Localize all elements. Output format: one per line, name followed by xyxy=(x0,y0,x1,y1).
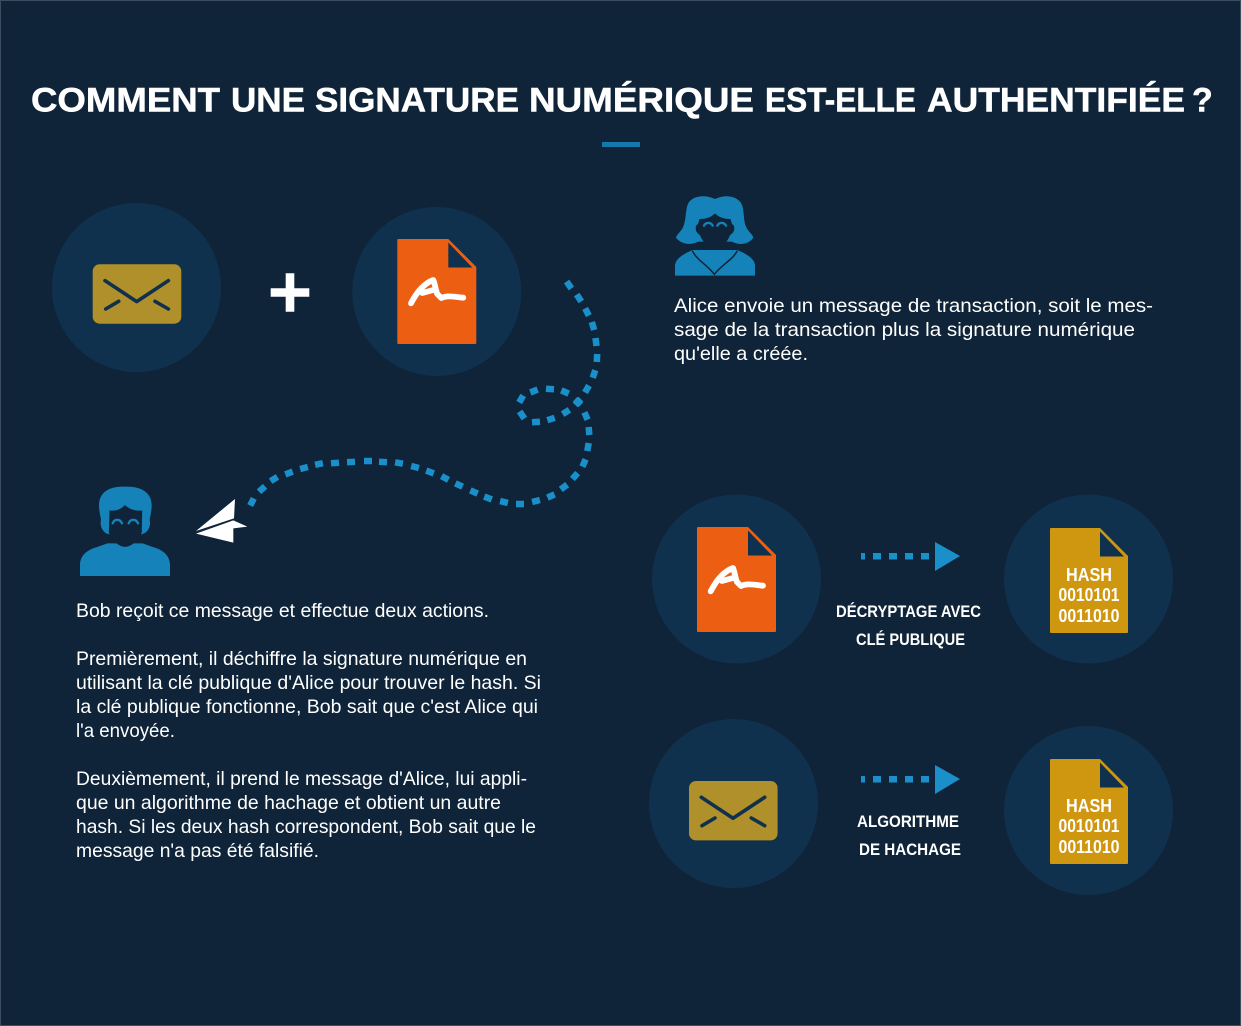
arrow: hashing xyxy=(861,765,960,794)
title underline accent xyxy=(602,142,640,147)
text: Bob description: l'a envoyée. xyxy=(76,720,175,742)
icon: hash document in circle: HASH xyxy=(1066,796,1112,816)
panel: hash message row xyxy=(649,719,1173,895)
text: Bob description: Premièrement, il déchiffre la signature numérique en xyxy=(76,648,527,670)
title: AUTHENTIFIÉE xyxy=(927,82,1185,120)
text: Alice description: qu'elle a créée. xyxy=(674,343,808,365)
text: Alice description xyxy=(674,295,1153,365)
label: decrypt with public key xyxy=(836,602,981,649)
text: Bob description: message n'a pas été falsifié. xyxy=(76,840,319,862)
title: COMMENT xyxy=(31,82,220,120)
title: NUMÉRIQUE xyxy=(529,82,754,120)
label: hashing algorithm xyxy=(857,812,961,859)
text: Bob description xyxy=(76,600,541,862)
label: decrypt with public key: DÉCRYPTAGE AVEC xyxy=(836,602,981,621)
text: Alice description: Alice envoie un message de transaction, soit le mes- xyxy=(674,295,1153,317)
title: ? xyxy=(1192,82,1213,120)
icon: Alice xyxy=(675,196,755,276)
icon: plus sign xyxy=(271,273,309,312)
arrow: decrypt xyxy=(861,542,960,571)
icon: envelope in circle xyxy=(52,203,221,372)
title: UNE xyxy=(231,82,305,120)
icon: envelope in circle xyxy=(649,719,818,888)
title xyxy=(31,82,1213,120)
panel: decrypt signature row xyxy=(652,494,1173,664)
icon: hash document in circle: 0011010 xyxy=(1058,606,1120,626)
title: SIGNATURE xyxy=(315,82,519,120)
label: decrypt with public key: CLÉ PUBLIQUE xyxy=(856,630,965,649)
arrow: dotted flight path xyxy=(250,282,597,506)
icon: paper plane xyxy=(196,499,247,543)
text: Bob description: Bob reçoit ce message et effectue deux actions. xyxy=(76,600,489,622)
icon: hash document in circle: 0011010 xyxy=(1058,837,1120,857)
label: hashing algorithm: ALGORITHME xyxy=(857,812,959,831)
text: Bob description: utilisant la clé publique d'Alice pour trouver le hash. Si xyxy=(76,672,541,694)
icon: hash document in circle xyxy=(1004,494,1173,664)
text: Bob description: que un algorithme de hachage et obtient un autre xyxy=(76,792,501,814)
label: hashing algorithm: DE HACHAGE xyxy=(859,840,961,859)
icon: hash document in circle: 0010101 xyxy=(1058,816,1120,836)
icon: hash document in circle: 0010101 xyxy=(1058,585,1120,605)
icon: hash document in circle: HASH xyxy=(1066,565,1112,585)
icon: hash document in circle xyxy=(1004,726,1173,895)
icon: Bob xyxy=(80,487,170,576)
text: Alice description: sage de la transaction plus la signature numérique xyxy=(674,319,1135,341)
text: Bob description: Deuxièmement, il prend le message d'Alice, lui appli- xyxy=(76,768,527,790)
panel: message plus signature xyxy=(52,203,521,376)
icon: signed document in circle xyxy=(352,207,521,376)
text: Bob description: la clé publique fonctionne, Bob sait que c'est Alice qui xyxy=(76,696,538,718)
icon: signed document in circle xyxy=(652,494,821,664)
title: EST-ELLE xyxy=(765,82,916,120)
text: Bob description: hash. Si les deux hash correspondent, Bob sait que le xyxy=(76,816,536,838)
